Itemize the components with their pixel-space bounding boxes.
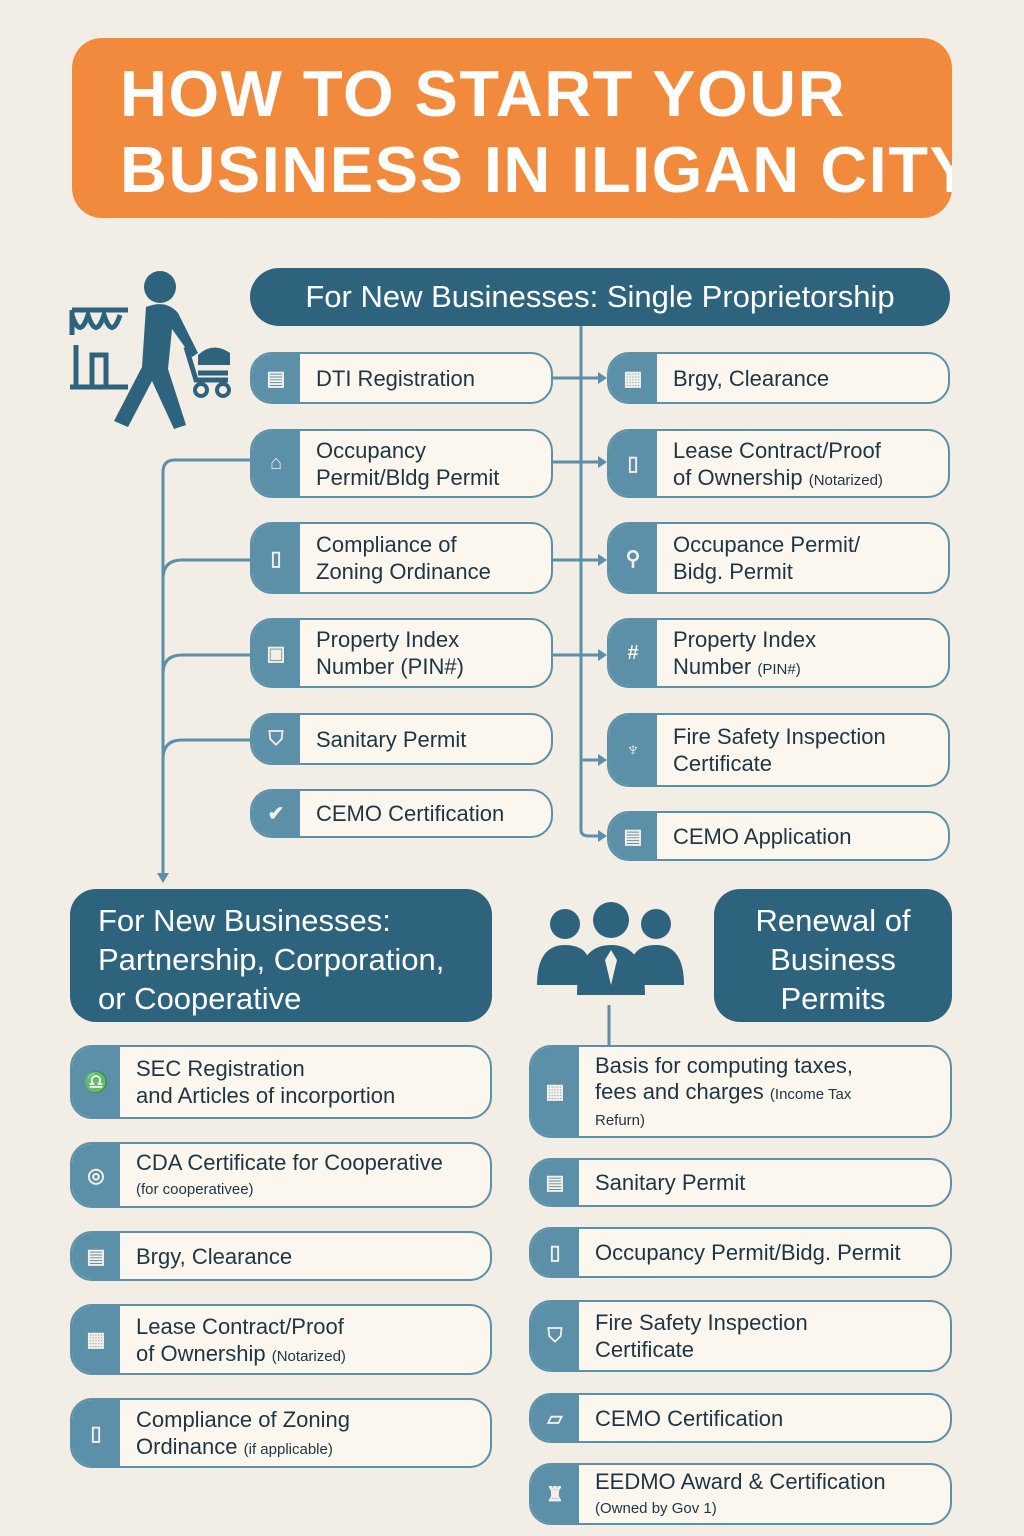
text: Number (PIN#) bbox=[316, 654, 464, 679]
text: ▯ bbox=[627, 453, 638, 475]
right items: single proprietorship bbox=[607, 352, 950, 404]
text: ▯ bbox=[270, 548, 282, 570]
text: Permit/Bldg Permit bbox=[316, 464, 499, 490]
right items: renewal: Basis for computing taxes, bbox=[595, 1052, 853, 1078]
text: Bidg. Permit bbox=[673, 559, 793, 584]
right items: renewal bbox=[529, 1045, 952, 1138]
text: ▤ bbox=[546, 1172, 564, 1194]
text: ✔ bbox=[268, 803, 284, 825]
text: Certificate bbox=[673, 751, 772, 776]
title: HOW TO START YOUR bbox=[120, 57, 846, 130]
text: EEDMO Award & Certification bbox=[595, 1469, 886, 1494]
text: ▦ bbox=[87, 1329, 105, 1351]
text: ▯ bbox=[549, 1242, 560, 1264]
text: Certificate bbox=[595, 1337, 694, 1362]
text: ⛉ bbox=[268, 728, 284, 750]
text: Zoning Ordinance bbox=[316, 559, 491, 584]
heading: renewal: Permits bbox=[780, 981, 886, 1016]
text: Fire Safety Inspection bbox=[595, 1310, 808, 1335]
heading: renewal bbox=[714, 889, 952, 1022]
right items: renewal: ▦ bbox=[546, 1081, 564, 1103]
text: ◎ bbox=[87, 1164, 105, 1186]
right items: single proprietorship: ▦ bbox=[624, 368, 642, 390]
left items: partnership: and Articles of incorportion bbox=[136, 1083, 395, 1108]
heading: single proprietorship: For New Businesses: Single Proprietorship bbox=[305, 279, 895, 314]
text: Lease Contract/Proof bbox=[673, 438, 881, 462]
left items: partnership: ♎ bbox=[84, 1072, 108, 1094]
text: Occupancy bbox=[316, 438, 426, 462]
text: Property Index bbox=[673, 627, 816, 652]
connectors bbox=[157, 326, 607, 883]
heading: partnership bbox=[70, 889, 492, 1022]
text: Brgy, Clearance bbox=[136, 1244, 292, 1268]
text: ▣ bbox=[267, 642, 285, 664]
left items: single proprietorship: DTI Registration bbox=[316, 366, 475, 390]
text: CEMO Certification bbox=[316, 801, 504, 826]
left items: partnership bbox=[70, 1045, 492, 1119]
title: BUSINESS IN ILIGAN CITY bbox=[120, 133, 952, 206]
right items: renewal: Refurn) bbox=[595, 1112, 645, 1128]
heading: partnership: For New Businesses: bbox=[98, 903, 391, 938]
text: ▯ bbox=[90, 1422, 102, 1444]
heading: renewal: Renewal of bbox=[755, 903, 911, 938]
text: Property Index bbox=[316, 627, 459, 652]
text: ⌂ bbox=[270, 452, 282, 474]
text: ♜ bbox=[546, 1484, 564, 1506]
text: Ordinance (if applicable) bbox=[136, 1434, 333, 1459]
text: ⚲ bbox=[626, 548, 640, 570]
text: # bbox=[627, 642, 639, 664]
left items: partnership: SEC Registration bbox=[136, 1056, 305, 1081]
text: (Owned by Gov 1) bbox=[595, 1500, 717, 1517]
text: Sanitary Permit bbox=[595, 1170, 745, 1195]
text: Occupancy Permit/Bidg. Permit bbox=[595, 1240, 901, 1265]
text: ▱ bbox=[547, 1408, 563, 1430]
right items: single proprietorship: Brgy, Clearance bbox=[673, 366, 829, 390]
text: Sanitary Permit bbox=[316, 726, 466, 752]
text: Fire Safety Inspection bbox=[673, 724, 886, 749]
heading: partnership: Partnership, Corporation, bbox=[98, 942, 444, 977]
icon: shopper with store bbox=[70, 271, 231, 429]
text: (for cooperativee) bbox=[136, 1181, 254, 1198]
heading: single proprietorship bbox=[250, 268, 950, 326]
text: ▤ bbox=[87, 1246, 105, 1268]
title bbox=[72, 38, 952, 218]
text: CEMO Certification bbox=[595, 1406, 783, 1430]
text: Lease Contract/Proof bbox=[136, 1314, 344, 1338]
text: ⛉ bbox=[548, 1324, 562, 1346]
text: CEMO Application bbox=[673, 824, 852, 848]
text: CDA Certificate for Cooperative bbox=[136, 1150, 443, 1175]
right items: renewal: fees and charges (Income Tax bbox=[595, 1078, 851, 1104]
text: Occupance Permit/ bbox=[673, 532, 860, 557]
text: of Ownership (Notarized) bbox=[673, 464, 883, 490]
text: Compliance of bbox=[316, 532, 457, 557]
icon: people group bbox=[537, 902, 684, 1045]
left items: single proprietorship bbox=[250, 352, 553, 404]
text: ♆ bbox=[626, 738, 640, 760]
text: of Ownership (Notarized) bbox=[136, 1340, 346, 1366]
text: ▤ bbox=[624, 826, 642, 848]
heading: renewal: Business bbox=[770, 942, 896, 977]
heading: partnership: or Cooperative bbox=[98, 981, 301, 1016]
left items: single proprietorship: ▤ bbox=[267, 368, 285, 390]
text: Number (PIN#) bbox=[673, 654, 801, 679]
text: Compliance of Zoning bbox=[136, 1407, 350, 1432]
